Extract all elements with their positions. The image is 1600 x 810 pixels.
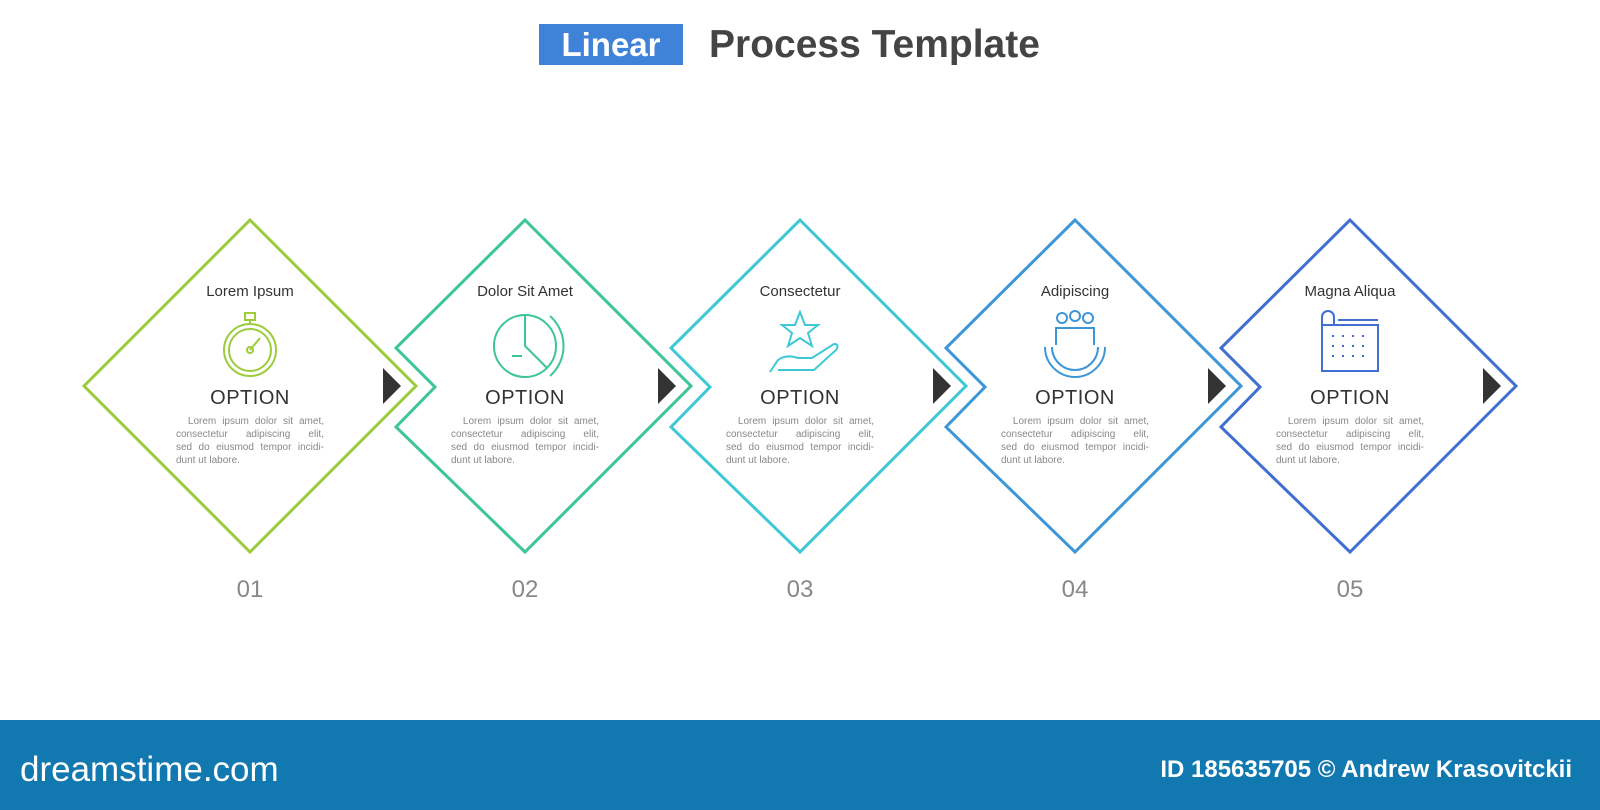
step 5 text: Lorem ipsum dolor sit amet,	[1288, 416, 1424, 427]
step 1 text: Lorem ipsum dolor sit amet,	[188, 416, 324, 427]
step 4 text: sed do eiusmod tempor incidi-	[1001, 442, 1149, 453]
step 3 diamond	[671, 220, 966, 552]
number 02: 02	[512, 576, 538, 603]
step 2 text: sed do eiusmod tempor incidi-	[451, 442, 599, 453]
step 4 text: Adipiscing	[1041, 283, 1109, 300]
step 4 text: dunt ut labore.	[1001, 455, 1065, 466]
step 2 text: Lorem ipsum dolor sit amet,	[463, 416, 599, 427]
step 1 text: dunt ut labore.	[176, 455, 240, 466]
step 2 text: Dolor Sit Amet	[477, 283, 573, 300]
footer bar	[0, 720, 1600, 810]
arrow 1	[383, 368, 401, 404]
icon: team gear	[1045, 311, 1105, 377]
step 1 text: sed do eiusmod tempor incidi-	[176, 442, 324, 453]
step 1 text: Lorem Ipsum	[206, 283, 294, 300]
step 2 diamond	[396, 220, 691, 552]
number 04: 04	[1062, 576, 1088, 603]
title text: Process Template	[709, 23, 1040, 66]
icon: pie chart	[494, 315, 564, 377]
step 5 diamond	[1221, 220, 1516, 552]
step 3 text: Consectetur	[760, 283, 840, 300]
icon: hand with star	[770, 312, 838, 372]
title highlight: Linear	[539, 24, 683, 65]
step 4 text	[1001, 283, 1149, 466]
step 3 text: OPTION	[760, 387, 840, 409]
step 4 text: OPTION	[1035, 387, 1115, 409]
step 4 text: consectetur adipiscing elit,	[1001, 429, 1149, 440]
icon: calendar	[1322, 311, 1378, 371]
arrow 2	[658, 368, 676, 404]
step 4 diamond	[946, 220, 1241, 552]
step 1 diamond	[84, 220, 416, 552]
step 1 text: consectetur adipiscing elit,	[176, 429, 324, 440]
number 01: 01	[237, 576, 263, 603]
icon: stopwatch	[224, 313, 276, 376]
number 05: 05	[1337, 576, 1363, 603]
arrow 3	[933, 368, 951, 404]
step 3 text: consectetur adipiscing elit,	[726, 429, 874, 440]
step 5 text: Magna Aliqua	[1305, 283, 1395, 300]
step 5 text: sed do eiusmod tempor incidi-	[1276, 442, 1424, 453]
step 5 text: dunt ut labore.	[1276, 455, 1340, 466]
step 4 text: Lorem ipsum dolor sit amet,	[1013, 416, 1149, 427]
arrow 5	[1483, 368, 1501, 404]
step 3 text: sed do eiusmod tempor incidi-	[726, 442, 874, 453]
step 5 text: OPTION	[1310, 387, 1390, 409]
step 5 text: consectetur adipiscing elit,	[1276, 429, 1424, 440]
title	[539, 23, 1040, 66]
step 2 text: dunt ut labore.	[451, 455, 515, 466]
step 5 text	[1276, 283, 1424, 466]
step 3 text: dunt ut labore.	[726, 455, 790, 466]
step 1 text	[176, 283, 324, 466]
step 1 text: OPTION	[210, 387, 290, 409]
arrow 4	[1208, 368, 1226, 404]
title highlight: Linear: Linear	[561, 26, 661, 63]
step 2 text: OPTION	[485, 387, 565, 409]
step 3 text	[726, 283, 874, 466]
step 3 text: Lorem ipsum dolor sit amet,	[738, 416, 874, 427]
step 2 text: consectetur adipiscing elit,	[451, 429, 599, 440]
number 03: 03	[787, 576, 813, 603]
footer credit: ID 185635705 © Andrew Krasovitckii	[1160, 756, 1572, 783]
footer logo: dreamstime.com	[20, 750, 279, 789]
step 2 text	[451, 283, 599, 466]
